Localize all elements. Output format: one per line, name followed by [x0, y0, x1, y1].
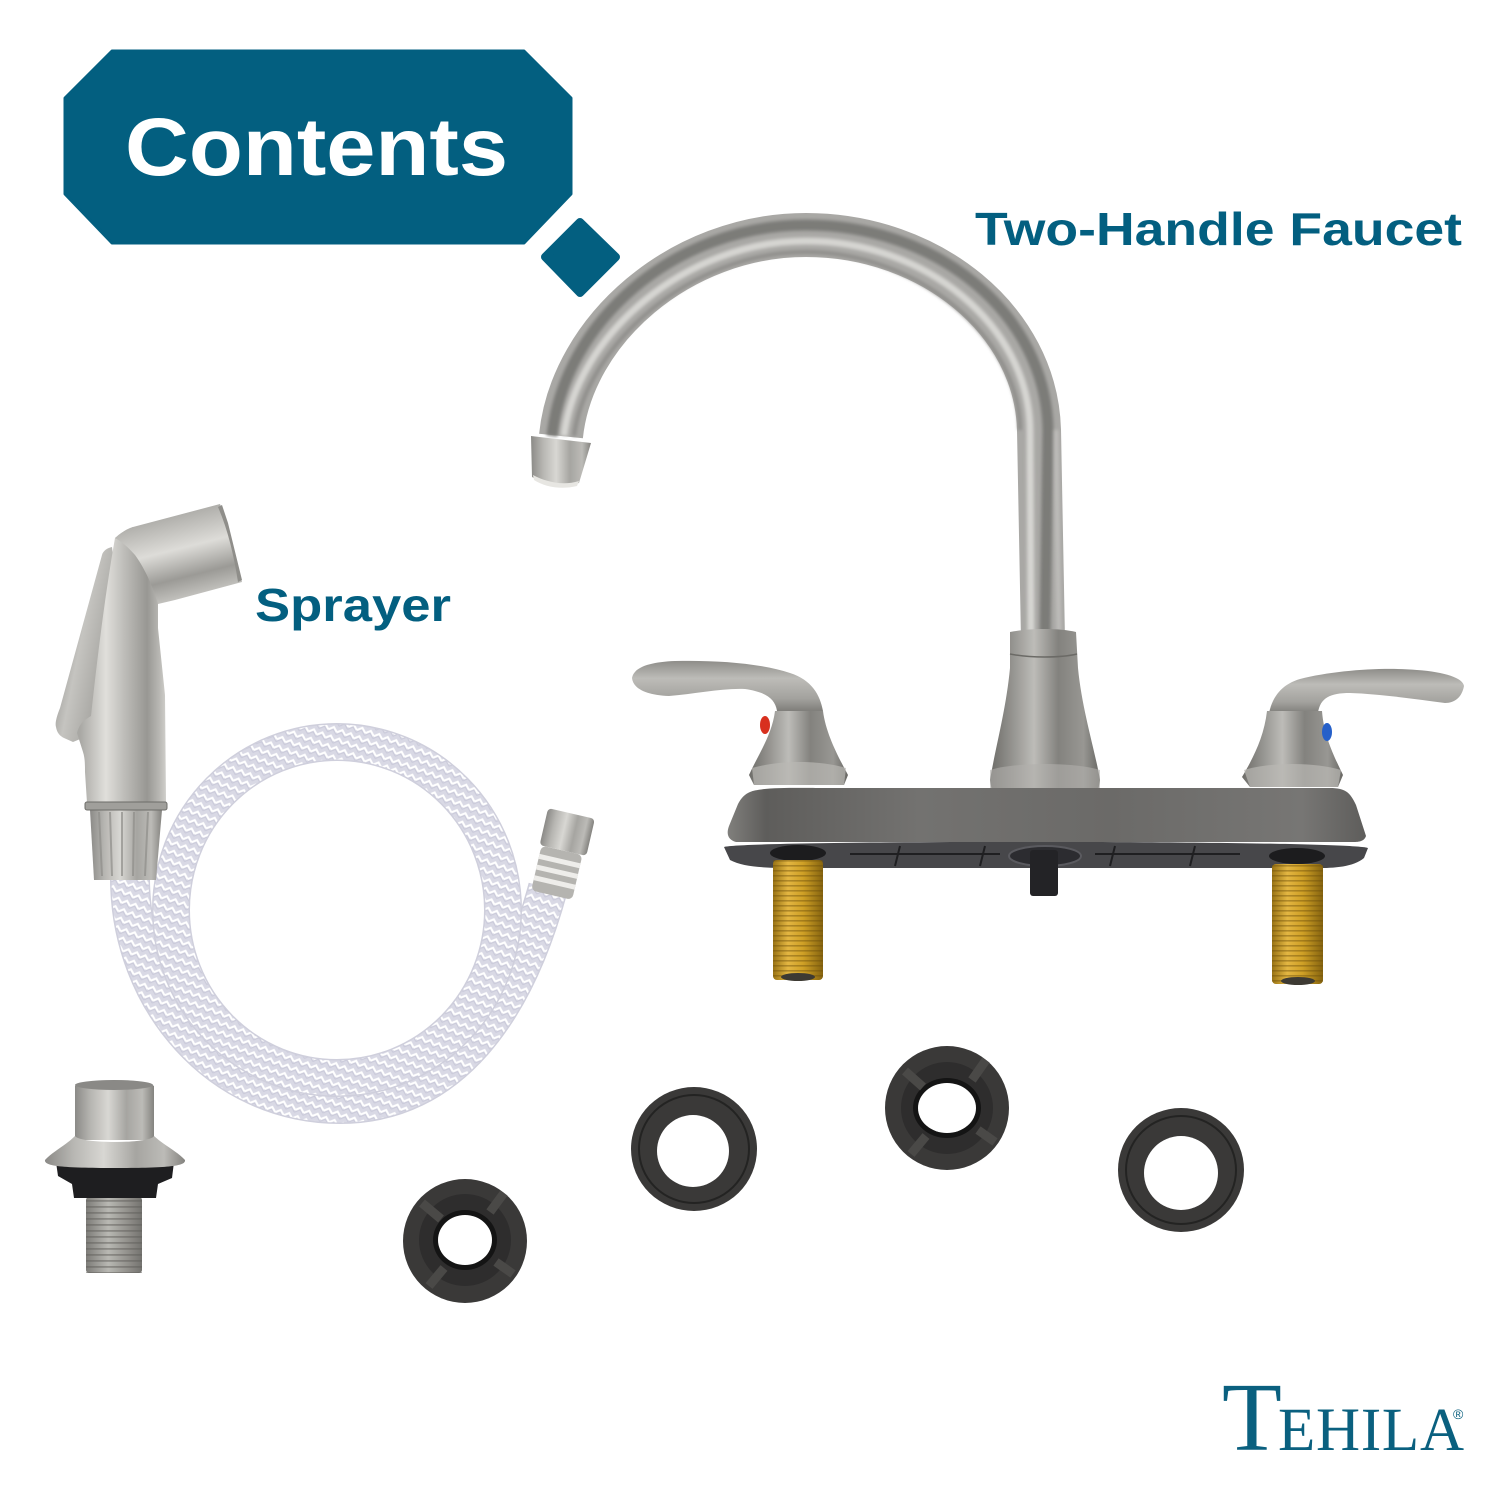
right handle [1242, 669, 1464, 787]
red hot indicator [760, 716, 770, 734]
sprayer hose [130, 742, 548, 1104]
logo: Tehila: T [1222, 1364, 1282, 1472]
heading badge: Contents [65, 51, 571, 243]
right lever [1269, 669, 1464, 713]
spray ring [85, 802, 167, 810]
logo: Tehila: EHILA [1278, 1397, 1464, 1464]
center base cone [990, 629, 1100, 792]
blue cold indicator [1322, 723, 1332, 741]
left lever [632, 661, 823, 711]
deck plate [728, 788, 1366, 842]
logo: Tehila: ® [1453, 1406, 1464, 1422]
threaded shank [86, 1197, 142, 1273]
spray body [77, 527, 166, 806]
flanged washer 1 [403, 1179, 527, 1303]
spray nozzle barrel [115, 504, 242, 604]
spray collar [90, 810, 162, 880]
center stud [1030, 850, 1058, 896]
left brass stud [773, 860, 823, 981]
two-handle faucet [531, 225, 1464, 985]
underside mounting plate [724, 842, 1368, 868]
flat washer 1 [631, 1087, 757, 1211]
right cone [1242, 711, 1343, 787]
flanged washer 2 [885, 1046, 1009, 1170]
label: Sprayer: Sprayer [255, 579, 451, 631]
heading text: Contents [125, 102, 508, 193]
sprayer head [56, 504, 242, 880]
label: Two-Handle Faucet: Two-Handle Faucet [975, 203, 1462, 255]
logo: Tehila [1222, 1364, 1464, 1472]
sprayer mount [45, 1080, 185, 1273]
faucet spout [552, 225, 1059, 640]
decorative diamond [545, 222, 616, 293]
spray trigger [56, 547, 118, 742]
black retainer [56, 1162, 174, 1198]
left cone [749, 711, 848, 785]
hose fitting [529, 808, 595, 901]
right brass stud [1272, 864, 1323, 985]
spout nozzle [531, 436, 591, 488]
left handle [632, 661, 848, 785]
barrel [75, 1080, 154, 1140]
flange [45, 1136, 185, 1168]
flat washer 2 [1118, 1108, 1244, 1232]
